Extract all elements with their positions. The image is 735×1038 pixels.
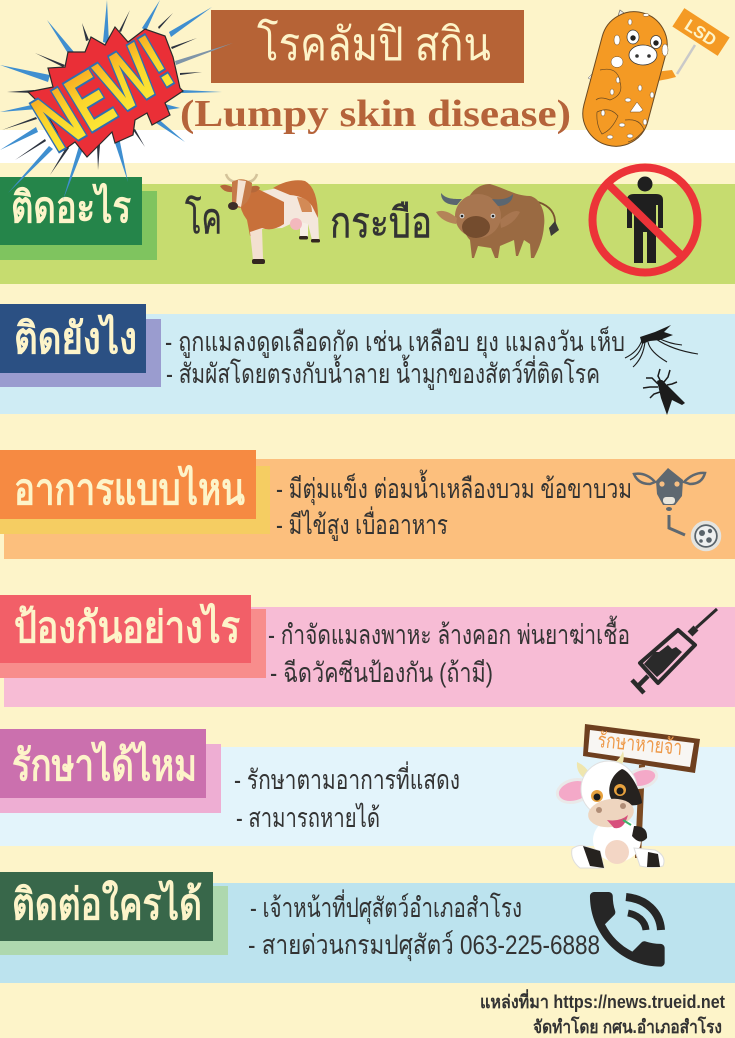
text: cattle: โค bbox=[185, 194, 222, 242]
text: symptom points: - มีไข้สูง เบื่ออาหาร bbox=[276, 506, 448, 541]
heading: contacts bbox=[0, 872, 228, 955]
mascot face bbox=[627, 30, 662, 65]
text: contact points: - เจ้าหน้าที่ปศุสัตว์อำเภอสำโรง bbox=[250, 889, 522, 925]
icon: sick cow head bbox=[634, 468, 720, 550]
heading: what it infects: ติดอะไร bbox=[11, 182, 131, 232]
title: Thai disease name: โรคลัมปิ สกิน bbox=[257, 18, 491, 70]
icon: mosquito bbox=[625, 325, 698, 367]
panel: contacts bbox=[0, 872, 735, 983]
heading: prevention: ป้องกันอย่างไร bbox=[14, 602, 240, 652]
heading: symptoms: อาการแบบไหน bbox=[14, 464, 245, 514]
text: treatment points: - สามารถหายได้ bbox=[236, 803, 380, 833]
text: treatment points: - รักษาตามอาการที่แสดง bbox=[234, 761, 460, 795]
panel: treatment bbox=[0, 724, 735, 868]
icon: telephone bbox=[590, 892, 665, 967]
icon: syringe bbox=[632, 609, 717, 693]
burst rays bbox=[0, 0, 222, 200]
mascot sign: LSD bbox=[681, 16, 720, 50]
skin contours bbox=[596, 69, 644, 142]
heading: symptoms bbox=[0, 450, 270, 534]
text: prevention points: - ฉีดวัคซีนป้องกัน (ถ้ามี) bbox=[270, 658, 493, 688]
heading: treatment: รักษาได้ไหม bbox=[12, 740, 197, 790]
red star bbox=[28, 27, 183, 157]
mascot: LSD virus character bbox=[575, 4, 730, 154]
text: spread points: - ถูกแมลงดูดเลือดกัด เช่น เหลือบ ยุง แมลงวัน เห็บ bbox=[165, 324, 625, 359]
heading: how it spreads bbox=[0, 304, 161, 387]
illustration: cartoon cow with sign bbox=[555, 724, 700, 868]
heading: contacts: ติดต่อใครได้ bbox=[12, 879, 202, 929]
title: Thai disease name bbox=[211, 10, 524, 83]
text: spread points: - สัมผัสโดยตรงกับน้ำลาย น้ำมูกของสัตว์ที่ติดโรค bbox=[166, 354, 600, 390]
heading: how it spreads: ติดยังไง bbox=[14, 313, 137, 363]
text: buffalo: กระบือ bbox=[330, 199, 432, 246]
badge: NEW burst bbox=[0, 0, 233, 200]
text: contact points: - สายด่วนกรมปศุสัตว์ 063-225-6888 bbox=[248, 929, 600, 962]
text: prevention points: - กำจัดแมลงพาหะ ล้างคอก พ่นยาฆ่าเชื้อ bbox=[268, 615, 630, 650]
panel: symptoms bbox=[0, 450, 735, 559]
heading: prevention bbox=[0, 595, 266, 678]
sign board: รักษาหายจ้า bbox=[597, 729, 683, 760]
text: symptom points bbox=[276, 469, 632, 541]
panel: prevention bbox=[0, 595, 735, 707]
panel: what it infects bbox=[0, 168, 735, 284]
icon: cow bbox=[220, 174, 320, 264]
text: symptom points: - มีตุ่มแข็ง ต่อมน้ำเหลืองบวม ข้อขาบวม bbox=[276, 469, 632, 506]
text: prevention points bbox=[268, 615, 630, 688]
text: treatment points bbox=[234, 761, 460, 833]
skin lumps bbox=[601, 14, 668, 139]
icon: not humans bbox=[592, 168, 698, 272]
heading: what it infects bbox=[0, 177, 157, 260]
footer: source and credit bbox=[480, 989, 725, 1037]
icon: fly bbox=[643, 369, 685, 415]
panel: how it spreads bbox=[0, 304, 735, 415]
heading: treatment bbox=[0, 729, 221, 813]
text: contact points bbox=[248, 889, 600, 962]
dark burst rays bbox=[2, 10, 202, 175]
person silhouette bbox=[627, 176, 663, 263]
icon: buffalo bbox=[436, 184, 559, 258]
text: spread points bbox=[165, 324, 625, 390]
subtitle: English disease name: (Lumpy skin disease) bbox=[180, 93, 571, 135]
sign board bbox=[583, 724, 700, 773]
mascot sign bbox=[672, 8, 730, 74]
